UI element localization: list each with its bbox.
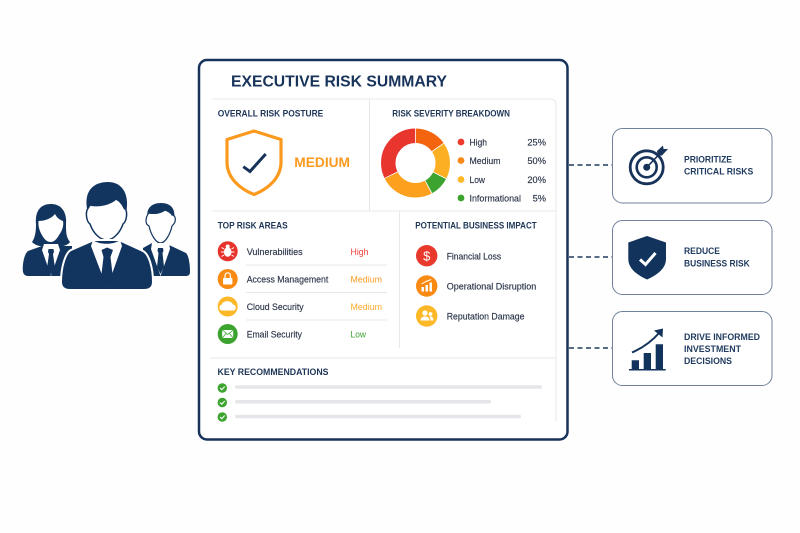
panel: key recommendations bbox=[218, 367, 542, 422]
connectors: dashed lines bbox=[569, 165, 612, 348]
row: access management: Access Management bbox=[247, 274, 329, 284]
row: email security: Low bbox=[350, 330, 366, 340]
card label: DECISIONS bbox=[684, 356, 732, 366]
icon: left executive bbox=[23, 204, 72, 276]
recommendation 2 bbox=[218, 398, 491, 407]
icon: centre executive bbox=[61, 182, 153, 290]
row: vulnerabilities: Vulnerabilities bbox=[247, 247, 303, 257]
row: financial loss: $ bbox=[423, 248, 431, 264]
legend: 20% bbox=[527, 175, 546, 185]
panel: potential business impact bbox=[415, 221, 537, 327]
card label: DRIVE INFORMED bbox=[684, 332, 760, 342]
row: financial loss: Financial Loss bbox=[447, 252, 502, 262]
row: financial loss bbox=[416, 245, 502, 266]
row: email security: Email Security bbox=[247, 330, 302, 340]
row: vulnerabilities: High bbox=[350, 247, 368, 257]
heading: title: EXECUTIVE RISK SUMMARY bbox=[231, 74, 447, 90]
row: cloud security: Cloud Security bbox=[247, 302, 304, 312]
row: access management bbox=[218, 269, 382, 289]
legend: 50% bbox=[527, 156, 546, 166]
card: reduce business risk bbox=[612, 220, 772, 294]
panel: executive risk summary dashboard bbox=[199, 60, 568, 440]
card label bbox=[684, 154, 753, 176]
card label: CRITICAL RISKS bbox=[684, 166, 753, 176]
card label: BUSINESS RISK bbox=[684, 258, 750, 268]
executives group icon bbox=[23, 182, 190, 290]
card label: REDUCE bbox=[684, 246, 720, 256]
row: email security bbox=[218, 324, 366, 344]
risk level value: MEDIUM bbox=[294, 155, 350, 170]
icon: right executive bbox=[143, 203, 190, 276]
recommendation 1 bbox=[218, 383, 542, 393]
panel: overall risk posture bbox=[218, 109, 350, 194]
row: cloud security: Medium bbox=[350, 302, 382, 312]
row: operational disruption: Operational Disruption bbox=[447, 282, 536, 292]
heading: key recommendations: KEY RECOMMENDATIONS bbox=[218, 367, 328, 378]
panel: risk severity breakdown bbox=[384, 109, 546, 204]
card label bbox=[684, 246, 750, 268]
icon: solid shield with check bbox=[628, 236, 666, 280]
card label: PRIORITIZE bbox=[684, 154, 732, 164]
heading: top risk areas: TOP RISK AREAS bbox=[218, 221, 288, 232]
legend bbox=[458, 138, 546, 204]
card: drive informed investment decisions bbox=[612, 312, 772, 386]
legend: 25% bbox=[527, 138, 546, 148]
legend: High bbox=[470, 138, 487, 148]
icon: rising bar chart bbox=[629, 328, 666, 370]
card label bbox=[684, 332, 760, 366]
donut chart bbox=[384, 128, 447, 194]
legend: Informational bbox=[470, 194, 521, 204]
row: reputation damage: Reputation Damage bbox=[447, 312, 524, 322]
heading: overall risk posture: OVERALL RISK POSTURE bbox=[218, 109, 323, 120]
panel frame lines bbox=[210, 99, 556, 421]
legend: 5% bbox=[533, 194, 546, 204]
row: cloud security bbox=[218, 296, 382, 316]
recommendation 3 bbox=[218, 412, 521, 422]
panel: top risk areas bbox=[218, 221, 387, 344]
icon: target with arrow bbox=[630, 146, 668, 184]
icon: orange shield with check bbox=[227, 131, 281, 194]
card: prioritize critical risks bbox=[612, 128, 772, 203]
legend: Medium bbox=[470, 156, 501, 166]
row: access management: Medium bbox=[350, 274, 382, 284]
legend: Low bbox=[470, 175, 485, 185]
card label: INVESTMENT bbox=[684, 344, 741, 354]
heading: potential business impact: POTENTIAL BUSINESS IMPACT bbox=[415, 221, 537, 232]
row: vulnerabilities bbox=[218, 241, 368, 261]
heading: risk severity breakdown: RISK SEVERITY BREAKDOWN bbox=[392, 109, 510, 120]
